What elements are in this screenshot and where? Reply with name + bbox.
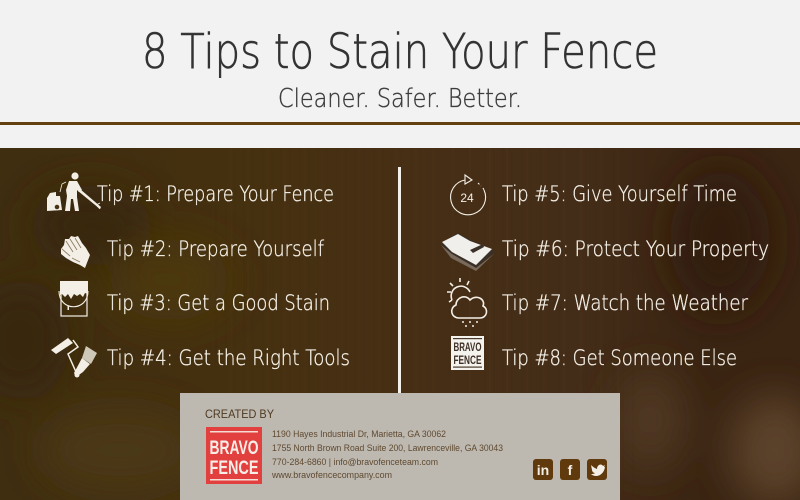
header divider: [0, 122, 800, 125]
tip 4: Tip #4: Get the Right Tools: [107, 346, 350, 370]
panel: created by footer: [180, 393, 620, 500]
tip 3: Tip #3: Get a Good Stain: [107, 291, 330, 315]
logo: bravo fence: [206, 427, 262, 484]
icon: facebook: f: [568, 462, 573, 478]
icon: linkedin: in: [537, 462, 549, 478]
contact details: www.bravofencecompany.com: [271, 470, 392, 480]
tip 8: Tip #8: Get Someone Else: [502, 346, 737, 370]
created by label: CREATED BY: [205, 409, 274, 421]
tips left column: [97, 182, 350, 370]
contact details: [271, 429, 503, 480]
tip 5: Tip #5: Give Yourself Time: [502, 182, 737, 206]
logo: bravo fence: BRAVO: [210, 438, 258, 459]
icon: gloves: [61, 236, 90, 268]
center divider: [398, 167, 401, 393]
icon: facebook: [560, 459, 580, 480]
contact details: 1755 North Brown Road Suite 200, Lawrenceville, GA 30043: [272, 443, 503, 453]
tip 2: Tip #2: Prepare Yourself: [107, 237, 325, 261]
icon: bravo fence badge: BRAVO: [454, 342, 482, 354]
tips right column: [502, 182, 769, 370]
icon: bravo fence badge: FENCE: [454, 355, 482, 367]
header band: [0, 0, 800, 148]
contact details: 1190 Hayes Industrial Dr, Marietta, GA 30062: [272, 429, 446, 439]
title: 8 Tips to Stain Your Fence: [142, 24, 658, 80]
icon: paint can: [59, 281, 88, 316]
tip 1: Tip #1: Prepare Your Fence: [97, 182, 334, 206]
icon: pressure washer worker: [47, 172, 101, 211]
icon: linkedin: [533, 459, 553, 480]
icon: protective sheets: [441, 233, 495, 271]
tip 6: Tip #6: Protect Your Property: [502, 237, 769, 261]
subtitle: Cleaner. Safer. Better.: [278, 84, 522, 114]
tip 7: Tip #7: Watch the Weather: [502, 291, 748, 315]
icon: sun behind cloud: [447, 278, 487, 326]
icon: twitter: [587, 459, 607, 480]
icon: roller and brush: [51, 338, 97, 378]
icon: 24 hour clock: [451, 175, 486, 215]
logo: bravo fence: FENCE: [210, 458, 258, 479]
icon: 24 hour clock: 24: [460, 191, 474, 205]
contact details: 770-284-6860 | info@bravofenceteam.com: [272, 457, 438, 467]
icon: bravo fence badge: [451, 336, 484, 370]
wood background photo: [0, 148, 800, 500]
